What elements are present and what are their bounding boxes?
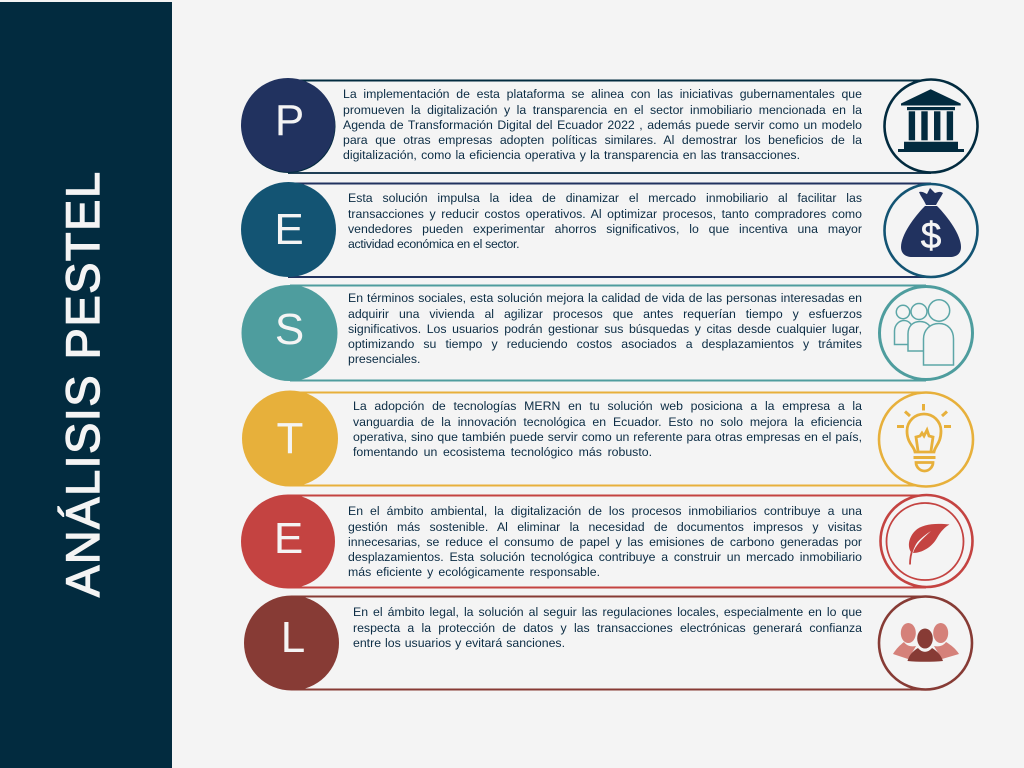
text: ecológico: desplazamientos. Esta solución tecnológica contribuye a construir un mercado inmobiliario [348, 550, 862, 564]
text: social: adquirir una vivienda al agilizar procesos que antes requerían tiempo y esfuerzos [348, 307, 862, 321]
text: social: En términos sociales, esta solución mejora la calidad de vida de las personas interesadas en [348, 291, 862, 305]
icon: team [879, 596, 972, 690]
text: político: promueven la digitalización y la transparencia en el sector inmobiliario mencionada en la [343, 103, 862, 117]
badge: T [242, 390, 338, 486]
badge: L [244, 596, 339, 690]
panel: sidebar [0, 2, 172, 768]
text: social: optimizando su tiempo y reduciendo costos asociados a desplazamientos y trámites [348, 337, 862, 351]
text: económico: Esta solución impulsa la idea de dinamizar el mercado inmobiliario al facilitar las [348, 191, 862, 205]
text: ecológico: innecesarias, se reduce el consumo de papel y las emisiones de carbono generadas por [348, 535, 862, 549]
text: tecnológico: La adopción de tecnologías MERN en tu solución web posiciona a la empresa a la [353, 399, 862, 413]
text: político [343, 87, 862, 162]
row outline [290, 392, 926, 486]
row outline [292, 596, 925, 690]
panel: E ecológico [241, 494, 974, 588]
panel: S social [242, 284, 974, 382]
row outline [288, 496, 926, 588]
text: tecnológico [353, 399, 862, 459]
badge: E [241, 182, 336, 277]
badge: T: T [277, 414, 303, 463]
badge: P: P [275, 96, 304, 145]
icon: leaf [880, 495, 972, 587]
badge: S: S [275, 305, 304, 354]
title: ANÁLISIS PESTEL [56, 172, 109, 597]
panel: T tecnológico [242, 390, 974, 488]
row outline [290, 286, 926, 380]
text: ecológico: gestión más sostenible. Al eliminar la necesidad de documentos impresos y visitas [348, 520, 862, 534]
icon: money bag: $ [921, 215, 941, 256]
text: político: para que otras empresas adopten políticas similares. Al demostrar los beneficios de la [343, 133, 862, 147]
icon: government building [884, 80, 978, 172]
text: político: La implementación de esta plataforma se alinea con las iniciativas gubernamentales que [343, 87, 862, 101]
text: económico [348, 191, 862, 251]
badge: L: L [281, 613, 305, 662]
text: legal: En el ámbito legal, la solución al seguir las regulaciones locales, especialmente en lo que [353, 605, 862, 619]
text: legal: respecta a la protección de datos y las transacciones electrónicas generará confianza [353, 621, 862, 635]
text: político: digitalización, como la eficiencia operativa y la transparencia en las transacciones. [343, 148, 800, 162]
text: ecológico [348, 504, 862, 579]
text: económico: actividad económica en el sector. [348, 237, 519, 251]
row outline [288, 80, 931, 173]
badge: E: E [274, 514, 303, 563]
badge: E [241, 494, 335, 588]
text: ecológico: más eficiente y ecológicamente responsable. [348, 565, 600, 579]
text: social: presenciales. [348, 352, 420, 366]
icon: light bulb [879, 392, 973, 486]
panel: P político [241, 78, 979, 174]
badge: S [242, 285, 338, 381]
text: legal [353, 605, 862, 650]
text: tecnológico: fomentando un ecosistema tecnológico más robusto. [353, 445, 652, 459]
text: económico: vendedores pueden experimentar ahorros significativos, lo que incentiva una mayor [348, 222, 862, 236]
badge: P [241, 78, 336, 173]
badge: E: E [274, 205, 304, 254]
row outline [288, 184, 931, 277]
icon: group of people [880, 286, 972, 380]
text: ecológico: En el ámbito ambiental, la digitalización de los procesos inmobiliarios contribuye a una [348, 504, 862, 518]
panel: L legal [244, 595, 974, 691]
text: legal: entre los usuarios y evitará sanciones. [353, 636, 565, 650]
text: económico: transacciones y reducir costos operativos. Al optimizar procesos, tanto compradores como [348, 207, 862, 221]
text: político: Agenda de Transformación Digital del Ecuador 2022 , además puede servir como un modelo [343, 118, 862, 132]
text: tecnológico: vanguardia de la innovación tecnológica en Ecuador. Esto no solo mejora la eficiencia [353, 415, 862, 429]
text: social [348, 291, 862, 366]
text: tecnológico: operativa, sino que también puede servir como un referente para otras empresas en el país, [353, 430, 862, 444]
icon: money bag [884, 184, 978, 277]
panel: E económico [241, 182, 979, 278]
text: social: significativos. Los usuarios podrán gestionar sus búsquedas y citas desde cualquier lugar, [348, 322, 862, 336]
